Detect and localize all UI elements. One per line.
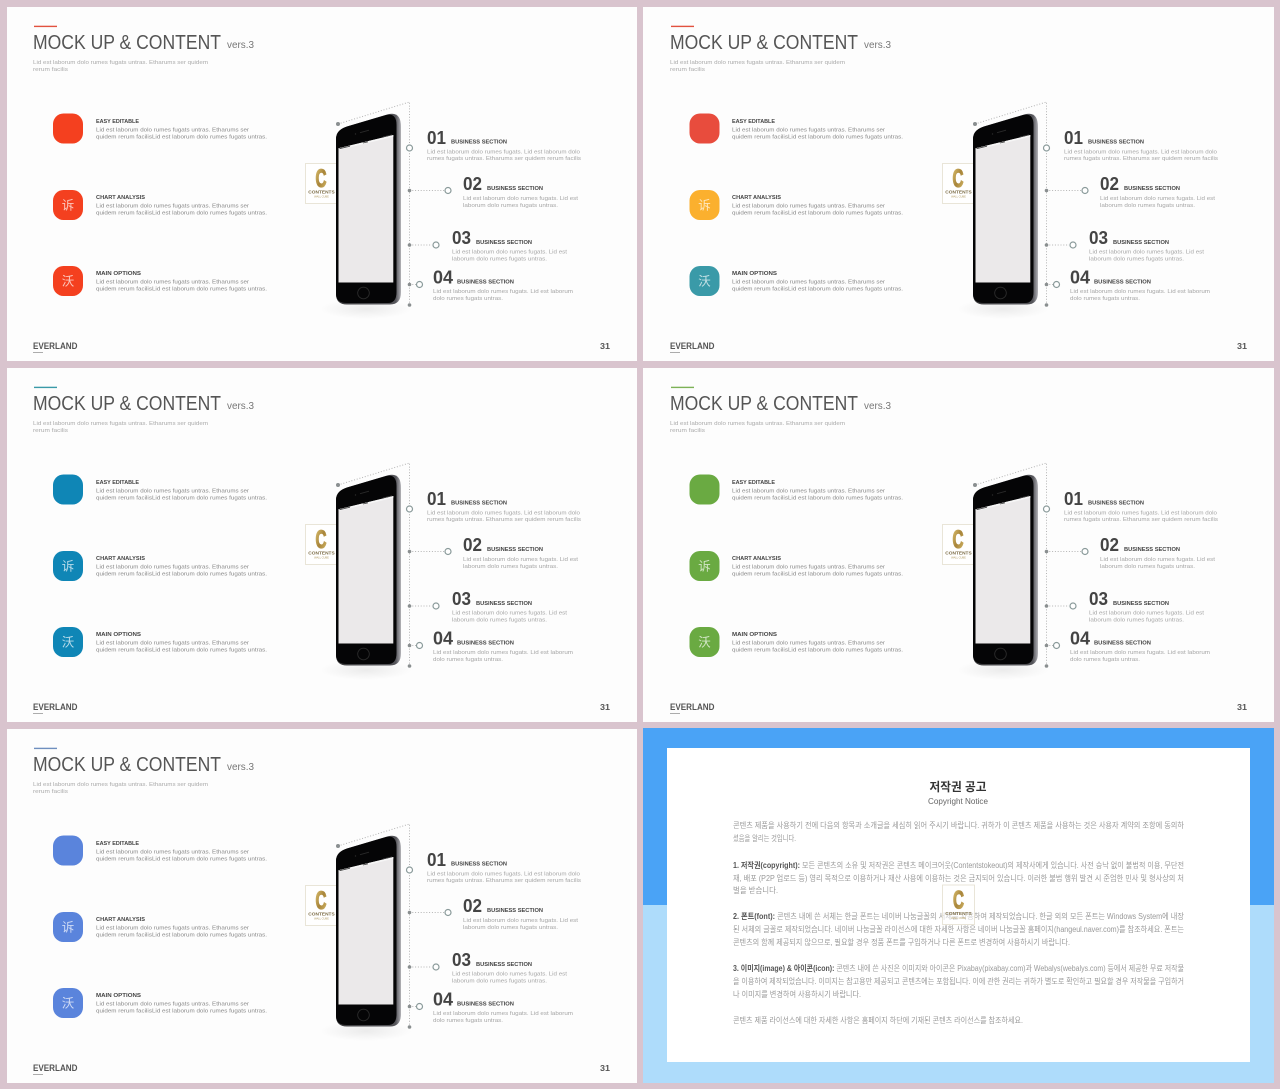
notice subtitle: Copyright Notice <box>928 796 988 806</box>
section 03 <box>1089 227 1204 262</box>
section 01: BUSINESS SECTION <box>451 500 507 506</box>
feature: chart analysis <box>96 917 267 938</box>
logo badge: C <box>953 886 964 914</box>
section 03: Lid est laborum dolo rumes fugats. Lid est <box>1089 250 1204 256</box>
feature: chart analysis: Lid est laborum dolo rumes fugats untras. Etharums ser <box>732 564 885 570</box>
section 02: laborum dolo rumes fugats untras. <box>463 925 558 931</box>
section 04 <box>433 988 573 1024</box>
icon: options badge <box>690 266 720 296</box>
feature: easy editable <box>96 480 267 502</box>
section 02: 02 <box>1100 534 1119 555</box>
feature: main options <box>96 271 267 292</box>
feature: easy editable <box>96 119 267 140</box>
clause 3: image and icon: 3. 이미지(image) & 아이콘(icon): 콘텐츠 내에 쓴 사진은 이미지와 아이콘은 Pixabay(pixabay.com)과 Webalys(webalys.com) 등에서 제공한 무료 저작물 <box>733 963 1184 973</box>
feature: easy editable: quidem rerum facilisLid est laborum dolo rumes fugats untras. <box>96 856 267 862</box>
feature: main options: quidem rerum facilisLid est laborum dolo rumes fugats untras. <box>96 286 267 292</box>
section 02: BUSINESS SECTION <box>487 547 543 553</box>
subtitle: Lid est laborum dolo rumes fugats untras. Etharums ser quidem <box>33 421 208 427</box>
section 04: 04 <box>1070 628 1091 648</box>
section 01: 01 <box>427 127 446 148</box>
feature: chart analysis <box>96 195 267 216</box>
section 04: dolo rumes fugats untras. <box>433 657 503 663</box>
section 03: laborum dolo rumes fugats untras. <box>1089 256 1184 262</box>
accent bar <box>671 387 694 388</box>
section 02: BUSINESS SECTION <box>1124 547 1180 553</box>
subtitle <box>670 421 845 434</box>
feature: chart analysis: quidem rerum facilisLid est laborum dolo rumes fugats untras. <box>732 572 903 578</box>
feature: main options: MAIN OPTIONS <box>96 271 141 277</box>
section 01 <box>427 127 581 162</box>
subtitle <box>33 60 208 73</box>
icon: chart badge: 诉 <box>698 198 711 212</box>
section 01: BUSINESS SECTION <box>1088 140 1144 146</box>
section 01: rumes fugats untras. Etharums ser quidem rerum facilis <box>427 156 581 162</box>
section 02 <box>463 895 578 931</box>
subtitle: rerum facilis <box>670 67 705 73</box>
logo badge: WALL CUBE <box>314 556 329 560</box>
feature: easy editable: Lid est laborum dolo rumes fugats untras. Etharums ser <box>96 488 249 494</box>
section 01: 01 <box>427 488 446 509</box>
section 02 <box>463 173 578 209</box>
intro paragraph <box>733 820 1185 843</box>
section 01: 01 <box>1064 488 1083 509</box>
clause 3: image and icon: 을 이용하여 제작되었습니다. 이미지는 참고용만 제공되고 콘텐츠에는 포함됩니다. 이에 관한 권리는 귀하가 별도로 확인하고 필요할 경우 저작물을 구입하거 <box>733 976 1184 986</box>
section 03: 03 <box>452 949 471 970</box>
section 02: 02 <box>1100 173 1119 194</box>
section 04 <box>433 628 573 663</box>
feature: easy editable: EASY EDITABLE <box>96 841 139 847</box>
section 01 <box>427 488 581 523</box>
feature: easy editable <box>732 480 903 502</box>
icon: options badge: 沃 <box>698 274 711 288</box>
clause 1: copyright <box>733 860 1184 895</box>
section 01 <box>427 849 581 884</box>
section 04: 04 <box>1070 266 1091 288</box>
section 01: rumes fugats untras. Etharums ser quidem rerum facilis <box>427 517 581 523</box>
clause 2: font <box>733 911 1185 947</box>
section 04: dolo rumes fugats untras. <box>433 296 503 302</box>
feature: chart analysis: Lid est laborum dolo rumes fugats untras. Etharums ser <box>732 204 885 210</box>
section 03: laborum dolo rumes fugats untras. <box>452 978 547 984</box>
feature: main options: MAIN OPTIONS <box>96 993 141 999</box>
feature: chart analysis: quidem rerum facilisLid est laborum dolo rumes fugats untras. <box>96 932 267 938</box>
footer brand: EVERLAND <box>670 702 715 712</box>
footer brand: EVERLAND <box>670 341 715 351</box>
section 04: 04 <box>433 628 454 648</box>
section 01: rumes fugats untras. Etharums ser quidem rerum facilis <box>1064 517 1218 523</box>
subtitle: Lid est laborum dolo rumes fugats untras. Etharums ser quidem <box>670 60 845 66</box>
feature: main options: Lid est laborum dolo rumes fugats untras. Etharums ser <box>732 280 885 286</box>
section 02: BUSINESS SECTION <box>487 186 543 192</box>
panel: slide 4 (green) <box>643 368 1274 722</box>
icon: blank badge <box>690 474 720 504</box>
icon: options badge: 沃 <box>698 636 711 650</box>
section 01: BUSINESS SECTION <box>1088 500 1144 506</box>
section 03: Lid est laborum dolo rumes fugats. Lid est <box>452 610 567 616</box>
title: MOCK UP & CONTENT <box>33 754 221 776</box>
connector lines <box>336 463 451 668</box>
section 03: BUSINESS SECTION <box>476 962 532 968</box>
feature: easy editable: EASY EDITABLE <box>732 119 775 125</box>
feature: chart analysis <box>732 195 903 216</box>
icon: chart badge <box>690 551 720 581</box>
version label: vers.3 <box>864 40 891 51</box>
section 04: 04 <box>433 988 454 1010</box>
section 02: laborum dolo rumes fugats untras. <box>463 564 558 570</box>
feature: main options <box>732 271 903 292</box>
footer brand: EVERLAND <box>33 702 78 712</box>
section 04: BUSINESS SECTION <box>457 280 514 286</box>
version label: vers.3 <box>227 401 254 412</box>
feature: chart analysis: CHART ANALYSIS <box>732 195 781 201</box>
clause 2: font: 2. 폰트(font): 콘텐츠 내에 쓴 서체는 한글 폰트는 네이버 나눔글꼴의 서체를 사용하여 제작되었습니다. 한글 외의 모든 폰트는 Windows System에 내장 <box>733 911 1185 921</box>
section 03: Lid est laborum dolo rumes fugats. Lid est <box>1089 610 1204 616</box>
feature: main options: quidem rerum facilisLid est laborum dolo rumes fugats untras. <box>96 1008 267 1014</box>
feature: main options: quidem rerum facilisLid est laborum dolo rumes fugats untras. <box>96 648 267 654</box>
title: MOCK UP & CONTENT <box>33 393 221 415</box>
section 02: BUSINESS SECTION <box>1124 186 1180 192</box>
feature: chart analysis: quidem rerum facilisLid est laborum dolo rumes fugats untras. <box>96 572 267 578</box>
section 01: rumes fugats untras. Etharums ser quidem rerum facilis <box>427 878 581 884</box>
phone mockup <box>320 836 412 1041</box>
section 02: Lid est laborum dolo rumes fugats. Lid est <box>463 918 578 924</box>
section 03 <box>1089 588 1204 624</box>
icon: chart badge: 诉 <box>62 920 74 934</box>
logo badge: CONTENTS <box>308 912 335 918</box>
section 04: dolo rumes fugats untras. <box>1070 296 1140 302</box>
phone mockup <box>957 114 1049 319</box>
section 02: 02 <box>463 534 482 555</box>
section 02: laborum dolo rumes fugats untras. <box>1100 564 1195 570</box>
section 01: Lid est laborum dolo rumes fugats. Lid est laborum dolo <box>427 872 580 878</box>
section 03: BUSINESS SECTION <box>1113 601 1169 607</box>
clause 3: image and icon <box>733 963 1184 999</box>
section 02: laborum dolo rumes fugats untras. <box>463 203 558 209</box>
feature: chart analysis: Lid est laborum dolo rumes fugats untras. Etharums ser <box>96 926 249 932</box>
subtitle: rerum facilis <box>33 428 68 434</box>
feature: easy editable: Lid est laborum dolo rumes fugats untras. Etharums ser <box>732 128 885 134</box>
clause 1: copyright: 재, 배포 (P2P 업로드 등) 영리 목적으로 이용하거나 재산 사용에 이용하는 것은 금지되어 있습니다. 이러한 불법 행위 발견 시 준엄한 민사 및 형사상의 처 <box>733 873 1184 883</box>
section 04: Lid est laborum dolo rumes fugats. Lid est laborum <box>433 1011 573 1017</box>
version label: vers.3 <box>227 762 254 773</box>
intro paragraph: 셨음을 알리는 것입니다. <box>733 833 796 843</box>
subtitle <box>670 60 845 73</box>
icon: options badge: 沃 <box>62 996 75 1010</box>
connector lines <box>973 102 1088 307</box>
feature: main options: MAIN OPTIONS <box>732 271 777 277</box>
section 04: BUSINESS SECTION <box>457 640 514 646</box>
logo badge <box>942 164 974 204</box>
title: MOCK UP & CONTENT <box>670 32 858 54</box>
section 04 <box>1070 266 1210 302</box>
clause 3: image and icon: 나 이미지를 변경하여 사용하시기 바랍니다. <box>733 989 861 999</box>
section 03: laborum dolo rumes fugats untras. <box>1089 618 1184 624</box>
connector lines <box>336 102 451 307</box>
title: MOCK UP & CONTENT <box>670 393 858 415</box>
logo badge: WALL CUBE <box>314 916 329 920</box>
clause 2: font: 된 서체의 글꼴로 제작되었습니다. 네이버 나눔글꼴 라이선스에 대한 자세한 사항은 네이버 나눔글꼴 홈페이지(hangeul.naver.com)를 참조하세요. 폰트는 <box>733 924 1184 934</box>
clause 1: copyright: 1. 저작권(copyright): 모든 콘텐츠의 소유 및 저작권은 콘텐츠 메이크어웃(Contentstokeout)의 제작사에게 있습니다. 사전 승낙 없이 불법적 이용, 무단전 <box>733 860 1184 870</box>
phone mockup <box>320 475 412 680</box>
logo badge: CONTENTS <box>945 911 972 917</box>
feature: easy editable <box>96 841 267 862</box>
logo badge: WALL CUBE <box>951 194 966 198</box>
section 03: BUSINESS SECTION <box>476 240 532 246</box>
icon: chart badge <box>53 190 83 220</box>
feature: easy editable: Lid est laborum dolo rumes fugats untras. Etharums ser <box>96 850 249 856</box>
connector lines <box>336 824 451 1029</box>
icon: options badge <box>53 627 83 657</box>
logo badge: C <box>952 526 964 554</box>
icon: options badge: 沃 <box>62 274 75 288</box>
icon: chart badge: 诉 <box>62 560 74 574</box>
closing line: 콘텐츠 제품 라이선스에 대한 자세한 사항은 홈페이지 하단에 기재된 콘텐츠 라이선스를 참조하세요. <box>733 1015 1023 1025</box>
panel: copyright notice <box>643 728 1274 1083</box>
phone mockup <box>957 475 1049 680</box>
feature: chart analysis <box>96 556 267 578</box>
intro paragraph: 콘텐츠 제품을 사용하기 전에 다음의 항목과 소개글을 세심히 읽어 주시기 바랍니다. 귀하가 이 콘텐츠 제품을 사용하는 것은 사용자 계약의 조항에 동의하 <box>733 820 1185 830</box>
footer brand: EVERLAND <box>33 341 78 351</box>
section 04: BUSINESS SECTION <box>1094 640 1151 646</box>
logo badge: CONTENTS <box>945 550 972 556</box>
logo badge <box>942 524 974 564</box>
section 01: Lid est laborum dolo rumes fugats. Lid est laborum dolo <box>1064 150 1217 156</box>
section 01: rumes fugats untras. Etharums ser quidem rerum facilis <box>1064 156 1218 162</box>
section 03 <box>452 949 567 984</box>
panel: slide 3 (teal blue) <box>7 368 637 722</box>
section 04: Lid est laborum dolo rumes fugats. Lid est laborum <box>433 289 573 295</box>
feature: main options <box>96 632 267 654</box>
section 03: 03 <box>452 227 471 248</box>
section 02: Lid est laborum dolo rumes fugats. Lid est <box>463 557 578 563</box>
section 01: BUSINESS SECTION <box>451 862 507 868</box>
icon: blank badge <box>53 836 83 866</box>
feature: easy editable: quidem rerum facilisLid est laborum dolo rumes fugats untras. <box>96 134 267 140</box>
icon: chart badge <box>690 190 720 220</box>
section 01: Lid est laborum dolo rumes fugats. Lid est laborum dolo <box>427 510 580 516</box>
logo badge <box>942 885 974 924</box>
logo badge: C <box>952 165 964 193</box>
section 04: Lid est laborum dolo rumes fugats. Lid est laborum <box>1070 289 1210 295</box>
icon: options badge: 沃 <box>62 636 75 650</box>
logo badge: CONTENTS <box>308 190 335 196</box>
subtitle: rerum facilis <box>670 428 705 434</box>
section 04: dolo rumes fugats untras. <box>433 1018 503 1024</box>
icon: blank badge <box>53 474 83 504</box>
page number: 31 <box>600 342 611 351</box>
page number: 31 <box>600 1064 611 1073</box>
section 03: 03 <box>452 588 471 609</box>
feature: main options: Lid est laborum dolo rumes fugats untras. Etharums ser <box>732 640 885 646</box>
feature: main options: quidem rerum facilisLid est laborum dolo rumes fugats untras. <box>732 286 903 292</box>
subtitle: rerum facilis <box>33 67 68 73</box>
section 01: Lid est laborum dolo rumes fugats. Lid est laborum dolo <box>427 150 580 156</box>
accent bar <box>671 26 694 27</box>
section 04: 04 <box>433 266 454 288</box>
logo badge <box>306 886 338 926</box>
icon: options badge <box>53 266 83 296</box>
section 04: Lid est laborum dolo rumes fugats. Lid est laborum <box>433 650 573 656</box>
phone mockup <box>320 114 412 319</box>
subtitle <box>33 421 208 434</box>
panel: slide 5 (periwinkle blue) <box>7 729 637 1083</box>
logo badge: C <box>316 887 326 915</box>
section 03: laborum dolo rumes fugats untras. <box>452 256 547 262</box>
logo badge: C <box>316 165 326 193</box>
feature: easy editable: quidem rerum facilisLid est laborum dolo rumes fugats untras. <box>96 496 267 502</box>
feature: easy editable: EASY EDITABLE <box>96 119 139 125</box>
logo badge: WALL CUBE <box>314 194 329 198</box>
section 01: 01 <box>1064 127 1083 148</box>
section 03: Lid est laborum dolo rumes fugats. Lid est <box>452 250 567 256</box>
section 02 <box>1100 173 1215 209</box>
feature: chart analysis: CHART ANALYSIS <box>96 917 145 923</box>
section 02: Lid est laborum dolo rumes fugats. Lid est <box>1100 196 1215 202</box>
section 04: BUSINESS SECTION <box>457 1002 514 1008</box>
version label: vers.3 <box>864 401 891 412</box>
section 03: 03 <box>1089 588 1108 609</box>
feature: easy editable: quidem rerum facilisLid est laborum dolo rumes fugats untras. <box>732 134 903 140</box>
logo badge: CONTENTS <box>945 190 972 196</box>
subtitle: Lid est laborum dolo rumes fugats untras. Etharums ser quidem <box>33 60 208 66</box>
accent bar <box>34 387 57 388</box>
icon: options badge <box>690 627 720 657</box>
feature: chart analysis: Lid est laborum dolo rumes fugats untras. Etharums ser <box>96 564 249 570</box>
clause 2: font: 콘텐츠의 함께 제공되지 않으므로, 필요할 경우 정품 폰트를 구입하거나 다른 폰트로 변경하여 사용하시기 바랍니다. <box>733 937 1070 947</box>
subtitle: Lid est laborum dolo rumes fugats untras. Etharums ser quidem <box>670 421 845 427</box>
feature: easy editable: EASY EDITABLE <box>732 480 775 486</box>
icon: chart badge <box>53 912 83 942</box>
section 03: laborum dolo rumes fugats untras. <box>452 618 547 624</box>
feature: chart analysis <box>732 556 903 578</box>
version label: vers.3 <box>227 40 254 51</box>
section 04: dolo rumes fugats untras. <box>1070 657 1140 663</box>
section 02: 02 <box>463 895 482 916</box>
section 03: 03 <box>1089 227 1108 248</box>
logo badge <box>306 164 338 204</box>
feature: chart analysis: CHART ANALYSIS <box>96 556 145 562</box>
logo badge: C <box>316 526 326 554</box>
section 01: 01 <box>427 849 446 870</box>
section 02: Lid est laborum dolo rumes fugats. Lid est <box>463 196 578 202</box>
feature: chart analysis: CHART ANALYSIS <box>96 195 145 201</box>
feature: chart analysis: Lid est laborum dolo rumes fugats untras. Etharums ser <box>96 204 249 210</box>
section 03: Lid est laborum dolo rumes fugats. Lid est <box>452 972 567 978</box>
feature: easy editable <box>732 119 903 140</box>
subtitle: Lid est laborum dolo rumes fugats untras. Etharums ser quidem <box>33 782 208 788</box>
logo badge <box>306 524 338 564</box>
icon: chart badge: 诉 <box>698 560 711 574</box>
section 02: BUSINESS SECTION <box>487 908 543 914</box>
feature: chart analysis: quidem rerum facilisLid est laborum dolo rumes fugats untras. <box>732 210 903 216</box>
icon: options badge <box>53 988 83 1018</box>
logo badge: CONTENTS <box>308 550 335 556</box>
page number: 31 <box>1237 703 1248 712</box>
feature: chart analysis: quidem rerum facilisLid est laborum dolo rumes fugats untras. <box>96 210 267 216</box>
clause 1: copyright: 벌을 받습니다. <box>733 885 778 895</box>
feature: easy editable: Lid est laborum dolo rumes fugats untras. Etharums ser <box>96 128 249 134</box>
section 01: BUSINESS SECTION <box>451 140 507 146</box>
section 04 <box>433 266 573 302</box>
feature: main options: Lid est laborum dolo rumes fugats untras. Etharums ser <box>96 640 249 646</box>
section 04: Lid est laborum dolo rumes fugats. Lid est laborum <box>1070 650 1210 656</box>
feature: easy editable: quidem rerum facilisLid est laborum dolo rumes fugats untras. <box>732 496 903 502</box>
footer brand: EVERLAND <box>33 1063 78 1073</box>
subtitle <box>33 782 208 795</box>
section 04 <box>1070 628 1210 663</box>
section 02 <box>1100 534 1215 570</box>
section 04: BUSINESS SECTION <box>1094 280 1151 286</box>
accent bar <box>34 748 57 749</box>
section 01: Lid est laborum dolo rumes fugats. Lid est laborum dolo <box>1064 510 1217 516</box>
connector lines <box>973 463 1088 668</box>
panel: slide 2 (multicolour) <box>643 7 1274 361</box>
section 03 <box>452 227 567 262</box>
icon: blank badge <box>53 114 83 144</box>
section 02: 02 <box>463 173 482 194</box>
icon: blank badge <box>690 114 720 144</box>
title: MOCK UP & CONTENT <box>33 32 221 54</box>
feature: main options: quidem rerum facilisLid est laborum dolo rumes fugats untras. <box>732 648 903 654</box>
section 03: BUSINESS SECTION <box>476 601 532 607</box>
feature: easy editable: Lid est laborum dolo rumes fugats untras. Etharums ser <box>732 488 885 494</box>
section 02: laborum dolo rumes fugats untras. <box>1100 203 1195 209</box>
accent bar <box>34 26 57 27</box>
section 02 <box>463 534 578 570</box>
feature: main options: MAIN OPTIONS <box>96 632 141 638</box>
section 01 <box>1064 488 1218 523</box>
page number: 31 <box>600 703 611 712</box>
feature: main options <box>732 632 903 654</box>
feature: main options: Lid est laborum dolo rumes fugats untras. Etharums ser <box>96 1002 249 1008</box>
feature: main options <box>96 993 267 1014</box>
logo badge: WALL CUBE <box>951 916 966 920</box>
section 03 <box>452 588 567 624</box>
logo badge: WALL CUBE <box>951 556 966 560</box>
subtitle: rerum facilis <box>33 789 68 795</box>
feature: easy editable: EASY EDITABLE <box>96 480 139 486</box>
section 03: BUSINESS SECTION <box>1113 240 1169 246</box>
panel: slide 1 (red) <box>7 7 637 361</box>
icon: chart badge: 诉 <box>62 198 74 212</box>
section 02: Lid est laborum dolo rumes fugats. Lid est <box>1100 557 1215 563</box>
page number: 31 <box>1237 342 1248 351</box>
feature: main options: Lid est laborum dolo rumes fugats untras. Etharums ser <box>96 280 249 286</box>
feature: main options: MAIN OPTIONS <box>732 632 777 638</box>
icon: chart badge <box>53 551 83 581</box>
notice title: 저작권 공고 <box>930 779 986 794</box>
feature: chart analysis: CHART ANALYSIS <box>732 556 781 562</box>
section 01 <box>1064 127 1218 162</box>
